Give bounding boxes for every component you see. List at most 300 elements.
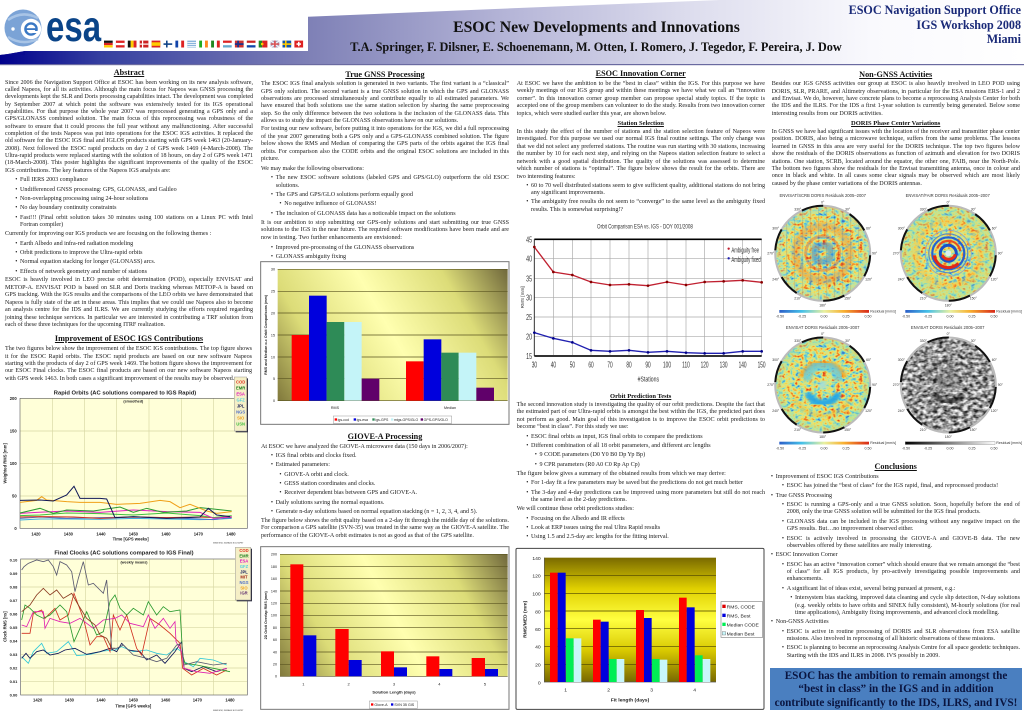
chart: ENVISAT greyscale residual polar plot: 300° <box>898 358 905 362</box>
chart: final clocks: 1440 <box>96 697 106 702</box>
chart: orbit comparison versus number of stations: 150 <box>758 362 766 370</box>
chart: GIOVE-A orbit overlap RMS: 2D Orbit Overlap RMS (mm) <box>264 590 268 639</box>
chart: RMS and median of orbit comparisons: igs-GPS <box>375 418 389 422</box>
chart: GIOVE-A orbit overlap RMS: 20 <box>273 663 277 667</box>
chart: FAIR residual polar plot: 300° <box>898 226 905 230</box>
heading: true GNSS processing: True GNSS Processing <box>345 70 425 79</box>
list: conclusions: Starting with the IDS and ILRS in 2008. IVS possibly in 2009. <box>787 653 940 659</box>
chart: orbit comparison versus number of stations: Ambiguity fixed <box>731 257 761 264</box>
subheading: station selection: Station Selection <box>617 120 664 127</box>
chart: final clocks: Clock RMS [ns] <box>2 611 7 642</box>
chart: RMS and median of orbit comparisons: 15 <box>271 333 275 337</box>
text: LEO involvement: an analysis centre for the IDS and ILRS. We are currently studying the efforts required regarding <box>5 307 253 313</box>
text: innovation intro: At ESOC we have the ambition to be the “best in class” within the IGS. For this purpose we have <box>517 81 765 87</box>
list: enhancements <box>271 244 414 260</box>
text: orbit prediction intro: the estimated part of our Ultra-rapid orbits is amongst the best within the IGS, the predicted part does <box>517 409 765 415</box>
legend: final clocks: NGS <box>239 580 249 585</box>
chart: ENVISAT colour residual polar plot: 90° <box>872 383 878 387</box>
chart: final clocks: Final Clocks (AC solutions compared to IGS Final) <box>54 550 194 556</box>
icon: member state flags <box>104 41 303 48</box>
list: enhancements: Improved pre-processing of the GLONASS observations <box>276 245 414 251</box>
chart: FAIR residual polar plot: 120° <box>991 277 998 281</box>
text: LEO involvement <box>4 276 253 328</box>
chart: ENVISAT greyscale residual polar plot: 60° <box>992 358 998 362</box>
callout: ambition statement: contribute significantly to the IDS, ILRS, and IVS! <box>775 696 1017 708</box>
chart: final clocks: 0.00 <box>10 692 18 697</box>
legend: final clocks: SIO <box>240 585 248 590</box>
text: station selection: the number by 10 for each next step, and relying on the Napeos station selection feature to select a <box>517 151 765 157</box>
chart: GIOVE-A orbit overlap RMS: 60 <box>273 638 277 642</box>
list: continuing studies: Using 1.5 and 2.5-day arc lengths for the fitting interval. <box>531 534 669 540</box>
text: abstract body: completion of the tests Napeos was put into operations for the ESOC IGS activities. It replaced the <box>5 131 253 137</box>
text: DORIS phase center <box>772 128 1020 187</box>
legend: final clocks: GFZ <box>240 564 249 569</box>
list: prediction setup <box>526 434 711 468</box>
list: conclusions: Intersystem bias stacking, improved data cleaning and cycle slip detection, N-day solutions <box>795 595 1020 601</box>
chart: FAIR residual polar plot: 330° <box>920 207 927 211</box>
colour bars and plot captions: 0.00 <box>820 314 828 318</box>
text: LEO involvement: Napeos is fully state of the art in these areas. This implies that we could use Napeos also to become <box>5 300 253 306</box>
chart: orbit comparison versus number of stations: 45 <box>526 236 532 245</box>
text: DORIS phase center: stations. One station, SCRB, located around the equator, the other one, FAIB, near the North-Pole. <box>772 159 1020 165</box>
text: true GNSS intro: observations are processed simultaneously and contribute equally to all estimated parameters. We <box>261 96 509 102</box>
chart: final clocks: 1430 <box>65 697 75 702</box>
chart: RMS and median of orbit comparisons <box>261 262 509 424</box>
chart: rapid orbits: 50 <box>12 494 17 499</box>
chart: final clocks: 0.01 <box>10 679 18 684</box>
list: GIOVE processing items <box>271 452 477 515</box>
text: improvement body: our ESOC Final clocks. The ESOC final products are based on our new software Napeos starting <box>5 368 252 374</box>
text: abstract body: IGS contributions. The key features of the Napeos IGS analysis are: <box>5 168 171 174</box>
text: GIOVE intro: At ESOC we have analyzed the GIOVE-A microwave data (150 days in 2006/2007): <box>261 444 468 450</box>
chart: orbit prediction RMS and median by fit length: 4 <box>693 688 696 694</box>
colour bars and plot captions: -0.50 <box>776 446 784 450</box>
text: GIOVE result <box>261 518 509 539</box>
chart: rapid orbits: 1440 <box>96 532 106 537</box>
text: continuing studies intro: We will continue these orbit predictions studies: <box>517 506 634 512</box>
list: conclusions: enhancements. <box>787 576 823 582</box>
title: ESOC New Developments and Innovations <box>453 19 740 36</box>
text: station selection: two interesting features: <box>517 174 576 180</box>
chart: ENVISAT greyscale residual polar plot: 270° <box>893 383 900 387</box>
chart: rapid orbits <box>2 391 247 545</box>
legend: final clocks: EMR <box>239 553 249 558</box>
text: true GNSS testing <box>261 126 509 162</box>
chart: SCRB residual polar plot: 60° <box>866 226 872 230</box>
chart: ENVISAT colour residual polar plot: 330° <box>794 339 802 343</box>
list: current themes: Normal equation stacking for longer (GLONASS) arcs. <box>20 259 155 265</box>
text: innovation intro: weekly meetings of our IGS group and within these meetings we have what we call an “innovation <box>517 88 765 94</box>
chart: ENVISAT greyscale residual polar plot: 0° <box>947 332 951 336</box>
list: key features: Full IERS 2003 compliance <box>20 177 88 183</box>
callout: ambition statement: ESOC has the ambition to remain amongst the <box>785 670 1007 682</box>
list: observations: The new ESOC software solutions (labeled GPS and GPS/GLO) outperform the old ESOC <box>276 175 509 181</box>
list: current themes: Orbit predictions to improve the Ultra-rapid orbits <box>20 250 143 256</box>
legend: final clocks: COD <box>239 548 249 553</box>
chart: ENVISAT colour residual polar plot: 240° <box>772 409 780 413</box>
chart: rapid orbits: 1470 <box>194 532 204 537</box>
chart: ENVISAT colour residual polar plot: 300° <box>772 358 780 362</box>
icon: ESA logo: esa <box>46 3 102 51</box>
chart: orbit prediction RMS and median by fit length: 40 <box>535 645 541 651</box>
list: conclusions: Non-GNSS Activities <box>776 619 829 625</box>
text: ambition: It is our ambition to stop submitting our GPS-only solutions and start submitting our true GNSS <box>261 220 509 226</box>
text: improvement body: it for the ESOC Rapid orbits. The ESOC rapid products are based on our new software Napeos <box>5 354 252 360</box>
office and workshop block: ESOC Navigation Support Office <box>849 3 1021 17</box>
chart: orbit comparison versus number of stations: Orbit Comparison ESA vs. IGS - DOY 001/2008 <box>597 224 693 231</box>
text: orbit prediction intro: The second innovation study is investigating the quality of our orbit predictions. Despite the fact that <box>517 402 765 408</box>
heading: GIOVE-A processing: GIOVE-A Processing <box>348 432 422 441</box>
text: LEO involvement: each of these three techniques for the upcoming ITRF realization. <box>5 322 165 328</box>
subheading: DORIS phase center variations: DORIS Phase Center Variations <box>851 120 940 127</box>
chart: GIOVE-A orbit overlap RMS: 40 <box>273 650 277 654</box>
chart: orbit comparison versus number of stations: 120 <box>701 362 709 370</box>
chart: final clocks: 0.04 <box>10 638 18 643</box>
chart: RMS and median of orbit comparisons: 30 <box>271 268 275 272</box>
list: GIOVE processing items: Estimated parameters: <box>276 462 330 468</box>
chart: orbit comparison versus number of stations: RMS [mm] <box>520 286 525 308</box>
chart: final clocks <box>2 550 247 712</box>
chart: rapid orbits: Time [GPS weeks] <box>113 537 149 542</box>
colour bars and plot captions: Residual [mm/s] <box>996 441 1022 445</box>
text: DORIS phase center: once in black and white. In all cases some clear signals may be observed which are most likely <box>772 173 1020 179</box>
chart: GIOVE-A orbit overlap RMS: 180 <box>271 565 277 569</box>
text: abstract body: developments kept the SLR and Doris processing capabilities intact. The development was completed <box>5 94 253 100</box>
legend: final clocks: JPL <box>240 569 248 574</box>
chart: orbit prediction RMS and median by fit length: 2 <box>607 688 610 694</box>
list: observations <box>271 174 509 217</box>
chart: orbit prediction RMS and median by fit length: 3 <box>650 688 653 694</box>
text: observations intro: We may make the following observations: <box>261 166 364 172</box>
chart: orbit comparison versus number of stations: 110 <box>682 362 690 370</box>
chart: GIOVE-A orbit overlap RMS: 120 <box>271 602 277 606</box>
chart: orbit comparison versus number of stations: 100 <box>663 362 671 370</box>
text: LEO involvement: joining these technique services. In particular we are interested in contributing a TRF solution from <box>5 315 253 321</box>
text: abstract body: software to ensure that it could process the full year without any malfunctioning. After successful <box>5 124 253 130</box>
list: conclusions: (e.g. weekly orbits to have orbits and SINEX fully consistent), M-hourly solutions (for real <box>795 603 1020 609</box>
office and workshop block <box>848 3 1021 46</box>
text: true GNSS intro: allows us to study the impact the GLONASS observations have on our solutions. <box>261 118 458 124</box>
chart: orbit prediction RMS and median by fit length: 80 <box>535 609 541 615</box>
chart: orbit comparison versus number of stations: Ambiguity free <box>731 248 759 255</box>
chart: orbit comparison versus number of stations: 30 <box>526 295 532 303</box>
chart: ENVISAT greyscale residual polar plot <box>893 332 1004 439</box>
list: conclusions: 2008, only the true GNSS solution will be submitted for the IGS final products. <box>787 509 980 515</box>
list: GIOVE processing items: Generate n-day solutions based on normal equation stacking (n = 1, 2, 3, 4, and 5). <box>276 509 477 515</box>
list: GIOVE processing items: GESS station coordinates and clocks. <box>284 481 375 487</box>
colour bars and plot captions: 0.00 <box>820 446 828 450</box>
chart: GIOVE-A orbit overlap RMS: 2 <box>348 681 351 686</box>
colour bars and plot captions: ENVISAT/SCRB DORIS Residuals 2005–2007 <box>779 193 867 198</box>
text: true GNSS testing: picture. <box>261 156 279 162</box>
text: LEO involvement: ESOC is heavily involved in LEO precise orbit determination (POD), especially ENVISAT and <box>5 277 253 283</box>
list: conclusions: of class” for all IGS products, by pro-actively investigating possible improvements and <box>787 569 1020 575</box>
list: conclusions <box>771 474 1020 659</box>
text: ambition: now in testing. Two further enhancements are envisioned: <box>261 235 402 241</box>
chart: orbit prediction RMS and median by fit length: Fit length (days) <box>611 698 650 704</box>
chart: FAIR residual polar plot: 60° <box>992 226 998 230</box>
chart: orbit prediction RMS and median by fit length: Median CODE <box>727 622 759 628</box>
chart: orbit prediction RMS and median by fit length: Median Best <box>727 631 755 637</box>
legend: final clocks: MIT <box>240 575 248 580</box>
chart: orbit comparison versus number of stations: 25 <box>526 314 532 322</box>
list: observations: The inclusion of GLONASS data has a noticeable impact on the solutions <box>276 211 456 217</box>
list: station findings: The ambiguity free results do not seem to “converge” to the same level as the ambiguity fixed <box>531 199 765 205</box>
colour bars and plot captions: Residual [mm/s] <box>870 310 896 314</box>
colour bars and plot captions: 0.50 <box>864 314 872 318</box>
chart: ENVISAT colour residual polar plot: 150° <box>844 428 852 432</box>
chart: SCRB residual polar plot: 330° <box>794 207 802 211</box>
chart: ENVISAT greyscale residual polar plot: 240° <box>898 409 905 413</box>
text: innovation intro <box>516 80 765 117</box>
text: DORIS phase center: learned in GNSS in this area are very useful for the DORIS technique. The top two figures below <box>772 144 1020 150</box>
colour bars and plot captions: -0.50 <box>902 314 910 318</box>
text: true GNSS intro <box>261 80 509 124</box>
chart: orbit prediction RMS and median by fit length: 120 <box>532 574 541 580</box>
chart: ENVISAT colour residual polar plot: 180° <box>819 435 827 439</box>
list: conclusions: ESOC has an active “innovation corner” which should ensure that we remain amongst the “best <box>787 562 1020 568</box>
legend: rapid orbits: SIO <box>237 416 245 421</box>
text: true GNSS testing: orbits. For comparison also the CODE orbits and the original ESOC solutions are included in this <box>261 149 509 155</box>
text: station selection: network with a good spatial distribution. The quality of the solutions was assessed to determine <box>517 159 765 165</box>
chart: ENVISAT greyscale residual polar plot: 210° <box>920 428 927 432</box>
text: abstract body: by September 2007 at which point the software was extensively tested for its IGS operational <box>5 102 253 108</box>
chart: GIOVE-A orbit overlap RMS: 140 <box>271 589 277 593</box>
chart: ENVISAT greyscale residual polar plot: 150° <box>970 428 977 432</box>
chart: rapid orbits: (smoothed) <box>123 399 144 403</box>
list: prediction setup: 9 CODE parameters (D0 Y0 B0 Dp Yp Bp) <box>540 452 645 458</box>
list: key features: Fortran compiler) <box>20 222 63 228</box>
list: conclusions: ESOC is planning to become an reprocessing Analysis Centre for all space geodetic techniques. <box>787 645 1020 651</box>
chart: rapid orbits: 1430 <box>64 532 74 537</box>
chart: FAIR residual polar plot: 270° <box>893 251 900 255</box>
text: station selection <box>516 128 765 180</box>
list: station findings: 60 to 70 well distributed stations seem to give sufficient quality, additional stations do not bring <box>531 183 765 189</box>
text: true GNSS testing: below shows the RMS and Median of comparing the GPS parts of the orbits against the IGS final <box>261 141 509 147</box>
chart: rapid orbits: 1460 <box>161 532 171 537</box>
chart: rapid orbits: IGS03 WG2, 2008 AUG 30 12:00PST <box>213 542 244 545</box>
text: true GNSS intro: have ensured that both solutions use the same station selection by sharing the same preprocessing <box>261 103 509 109</box>
legend: final clocks <box>235 547 252 601</box>
chart: final clocks: 1470 <box>193 697 203 702</box>
chart: SCRB residual polar plot: 270° <box>767 251 775 255</box>
chart: orbit prediction RMS and median by fit length: 60 <box>535 627 541 633</box>
colour bars and plot captions: -0.25 <box>924 446 932 450</box>
chart: final clocks: 0.05 <box>10 625 18 630</box>
legend: rapid orbits: NGS <box>236 410 245 415</box>
chart: rapid orbits: 100 <box>10 461 17 466</box>
colour bars and plot captions: 0.25 <box>842 446 850 450</box>
chart: final clocks: 1420 <box>33 697 43 702</box>
chart: final clocks: Time [GPS weeks] <box>115 703 152 708</box>
text: non-GNSS intro: and Envisat. We do, however, have concrete plans to become a reprocessing Analysis Center for both <box>772 96 1020 102</box>
heading: abstract: Abstract <box>114 68 144 77</box>
colour bars and plot captions: 0.00 <box>946 446 954 450</box>
chart: rapid orbits: 200 <box>10 396 17 401</box>
legend: rapid orbits: JPL <box>237 404 245 409</box>
chart: GIOVE-A orbit overlap RMS <box>261 547 509 709</box>
chart: FAIR residual polar plot: 240° <box>898 277 905 281</box>
text: true GNSS intro: The ESOC IGS final analysis solution is generated in two variants. The first variant is a “classical” <box>261 81 509 87</box>
chart: GIOVE-A orbit overlap RMS: 5 <box>484 681 487 686</box>
chart: orbit comparison versus number of stations: 15 <box>526 353 532 361</box>
chart: RMS and median of orbit comparisons: RMS and Median o-c Orbit Comparisons (mm) <box>264 294 268 375</box>
text: GIOVE result: For comparison a GPS satellite (SVN-35) was treated in the same way as the GIOVE-A satellite. The <box>261 525 509 531</box>
chart: orbit prediction RMS and median by fit length: RMS, CODE <box>727 604 756 610</box>
heading: conclusions: Conclusions <box>875 462 917 471</box>
list: key features: Non-overlapping processing using 24-hour solutions <box>20 196 148 202</box>
chart: FAIR residual polar plot: 150° <box>970 296 977 300</box>
chart: GIOVE-A orbit overlap RMS: 80 <box>273 626 277 630</box>
chart: ENVISAT colour residual polar plot: 30° <box>845 339 851 343</box>
list: current themes: Effects of network geometry and number of stations <box>20 269 147 275</box>
chart: GIOVE-A orbit overlap RMS: 200 <box>271 553 277 557</box>
chart: final clocks: 0.09 <box>10 571 18 576</box>
colour bars and plot captions: Residual [mm/s] <box>870 441 896 445</box>
text: non-GNSS intro: DORIS, SLR, PRARE, and Altimetry observations, in particular for the ESA missions ERS-1 and 2 <box>772 89 1020 95</box>
list: conclusions: time applications), Ambiguity fixing improvements, and advanced clock modelling. <box>795 610 999 616</box>
text: GIOVE result: performance of the GIOVE-A orbit estimates is not as good as that of the GPS satellite. <box>261 533 474 539</box>
subheading: orbit prediction tests: Orbit Prediction Tests <box>610 393 671 400</box>
list: conclusions: missions. Also involved in reprocessing of all historic observations of these missions. <box>787 636 995 642</box>
chart: RMS and median of orbit comparisons: 10 <box>271 355 275 359</box>
text: LEO involvement: METOP-A. ENVISAT POD is based on SLR and Doris tracking whereas METOP-A is based on <box>5 285 253 291</box>
chart: orbit comparison versus number of stations: 140 <box>739 362 747 370</box>
chart: GIOVE-A orbit overlap RMS: SVN 35 GIS <box>394 703 415 707</box>
authors: T.A. Springer, F. Dilsner, E. Schoenemann, M. Otten, I. Romero, J. Tegedor, F. Pereira, J. Dow <box>350 40 842 54</box>
list: prediction setup: ESOC final orbits as input, IGS final orbits to compare the predictions <box>531 434 703 440</box>
chart: GIOVE-A orbit overlap RMS: 1 <box>302 681 305 686</box>
text: orbit prediction intro <box>516 402 765 430</box>
chart: ENVISAT colour residual polar plot: 210° <box>794 428 802 432</box>
chart: orbit comparison versus number of stations: 40 <box>526 256 532 264</box>
chart: orbit comparison versus number of stations: 35 <box>526 275 532 284</box>
text: DORIS phase center: show the residuals of the DORIS observations as function of azimuth and elevation for two DORIS <box>772 151 1020 157</box>
text: improvement body <box>5 346 252 382</box>
chart: orbit comparison versus number of stations: 70 <box>607 362 613 370</box>
chart: orbit comparison versus number of stations: 80 <box>626 362 632 370</box>
list: GIOVE processing items: IGS final orbits and clocks fixed. <box>276 453 357 459</box>
chart: GIOVE-A orbit overlap RMS: 3 <box>393 681 396 686</box>
text: true GNSS intro: step. So the only difference between the two solutions is the inclusion of the GLONASS data. This <box>261 111 509 117</box>
chart: orbit prediction RMS and median by fit length: 100 <box>532 592 541 598</box>
chart: rapid orbits: 150 <box>10 429 17 434</box>
colour bars and plot captions: 0.50 <box>990 314 998 318</box>
chart: GIOVE-A orbit overlap RMS: 160 <box>271 577 277 581</box>
list: conclusions: ESOC is actively involved in processing the GIOVE-A and GIOVE-B data. The new <box>787 536 1020 542</box>
chart: rapid orbits: Rapid Orbits (AC solutions compared to IGS Rapid) <box>54 391 196 397</box>
chart: RMS and median of orbit comparisons: 25 <box>271 290 275 294</box>
list: conclusions: GPS results. But…no improvement observed either. <box>787 526 913 532</box>
text: LEO involvement: GPS tracking. With the IGS results and the comparisons of the LEO orbits we have demonstrated that <box>5 292 253 298</box>
chart: SCRB residual polar plot <box>767 200 878 307</box>
list: current themes <box>16 240 155 275</box>
list: station findings <box>526 182 765 213</box>
text: derive intro: The figure below gives a summary of the obtained results from which we may derive: <box>517 471 726 477</box>
chart: final clocks: 1460 <box>161 697 171 702</box>
list: GIOVE processing items: Receiver dependent bias between GPS and GIOVE-A. <box>284 490 417 496</box>
text: orbit prediction intro: become “best in class”. For this study we use: <box>517 424 629 430</box>
text: abstract body: old software for the ESOC IGS final and IGLOS products starting with GPS week 1463 (20-January- <box>5 138 253 144</box>
chart: ENVISAT greyscale residual polar plot: 330° <box>920 339 927 343</box>
chart: final clocks: 0.03 <box>10 652 18 657</box>
chart: FAIR residual polar plot: 180° <box>945 303 952 307</box>
list: key features <box>16 176 253 228</box>
office and workshop block: IGS Workshop 2008 <box>916 18 1021 32</box>
text: non-GNSS intro: the IDS and the ILRS. For the IDS a first 1-year solution is currently being generated. Below some <box>772 103 1020 109</box>
chart: final clocks: (weekly means) <box>120 561 148 565</box>
text: station selection: which number of stations is “optimal”. The figure below shows the result for the orbits. There are <box>517 166 765 172</box>
callout: ambition statement: “best in class” in the IGS and in addition <box>798 683 994 695</box>
chart: SCRB residual polar plot: 180° <box>819 303 827 307</box>
chart: RMS and median of orbit comparisons: 5 <box>273 377 275 381</box>
text: abstract body: Since 2006 the Navigation Support Office at ESOC has been working on its new analysis software, <box>5 80 253 86</box>
chart: ENVISAT colour residual polar plot: 270° <box>767 383 775 387</box>
text: innovation intro: topics, which were studied earlier this year, are shown below. <box>517 111 666 117</box>
colour bars and plot captions: -0.25 <box>798 314 806 318</box>
list: conclusions: observables offered by these satellites are really interesting. <box>787 543 932 549</box>
heading: innovation corner: ESOC Innovation Corner <box>596 69 686 78</box>
text: DORIS phase center: position. DORIS, also being a microwave technique, suffers from the same problems. The lessons <box>772 136 1020 142</box>
text: abstract body: (18-March-2008). This poster highlights the significant improvements of the quality of the ESOC <box>5 160 253 166</box>
text: DORIS phase center: caused by the phase center variations of the DORIS antennas. <box>772 181 922 187</box>
list: GIOVE processing items: GIOVE-A orbit and clock. <box>284 472 349 478</box>
text: non-GNSS intro <box>772 80 1020 117</box>
chart: SCRB residual polar plot: 30° <box>845 207 851 211</box>
chart: rapid orbits: 1420 <box>31 532 41 537</box>
list: conclusions: ESOC has joined the “best of class” for the IGS rapid, final, and reprocessed products! <box>787 483 998 489</box>
colour bars and plot captions <box>776 193 1022 450</box>
list: derived results: The 3-day and 4-day predictions can be improved using more parameters but still do not reach <box>531 490 765 496</box>
colour bars and plot captions: ENVISAT DORIS Residuals 2005–2007 <box>911 325 985 330</box>
chart: SCRB residual polar plot: 120° <box>865 277 873 281</box>
chart: final clocks: 0.10 <box>10 557 18 562</box>
colour bars and plot captions: -0.50 <box>776 314 784 318</box>
chart: rapid orbits: 0 <box>14 526 17 531</box>
list: key features: No day boundary continuity constraints <box>20 205 116 211</box>
colour bars and plot captions: ENVISAT DORIS Residuals 2005–2007 <box>786 325 860 330</box>
chart: rapid orbits: 1480 <box>226 532 236 537</box>
chart: orbit comparison versus number of stations: 90 <box>645 362 651 370</box>
text: non-GNSS intro: Besides our IGS GNSS activities our group at ESOC is also heavily involved in LEO POD using <box>772 81 1020 87</box>
list: conclusions: Improvement of ESOC IGS Contributions <box>776 474 879 480</box>
chart: FAIR residual polar plot: 30° <box>971 207 977 211</box>
chart: SCRB residual polar plot: 150° <box>844 296 852 300</box>
chart: ENVISAT colour residual polar plot: 120° <box>865 409 873 413</box>
list: station findings: results. This is somewhat surprising!? <box>531 207 623 213</box>
list: derived results <box>526 480 765 503</box>
chart: orbit comparison versus number of stations: 130 <box>720 362 728 370</box>
chart: FAIR residual polar plot <box>893 200 1004 307</box>
legend: rapid orbits <box>234 377 248 432</box>
text: abstract body: Ultra-rapid products were replaced starting with the solution of 18 hours, on day 2 of GPS week 1471 <box>5 153 253 159</box>
chart: RMS and median of orbit comparisons: GPS-GPS/GLO <box>424 418 448 422</box>
icon: ESA logo <box>4 3 102 51</box>
text: improvement body: with GPS week 1463. In both cases a significant improvement of the results may be observed. <box>5 376 234 382</box>
chart: orbit comparison versus number of stations: 60 <box>588 362 594 370</box>
list: conclusions: ESOC Innovation Corner <box>776 552 838 558</box>
chart: ENVISAT greyscale residual polar plot: 120° <box>991 409 998 413</box>
text: non-GNSS intro: interesting results from our DORIS activities. <box>772 111 883 117</box>
list: observations: The GPS and GPS/GLO solutions perform equally good <box>276 192 413 198</box>
text: true GNSS intro: GPS only solution. The second variant is a true GNSS solution in which the GPS and GLONASS <box>261 89 509 95</box>
chart: RMS and median of orbit comparisons: migs-GPS/GLO <box>394 418 418 422</box>
chart: orbit comparison versus number of stations: 20 <box>526 334 532 342</box>
chart: RMS and median of orbit comparisons: Median <box>444 406 456 410</box>
list: continuing studies: Look at ERP issues using the real Ultra Rapid results <box>531 525 660 531</box>
list: enhancements: GLONASS ambiguity fixing <box>276 254 346 260</box>
callout: ambition statement <box>770 668 1022 710</box>
